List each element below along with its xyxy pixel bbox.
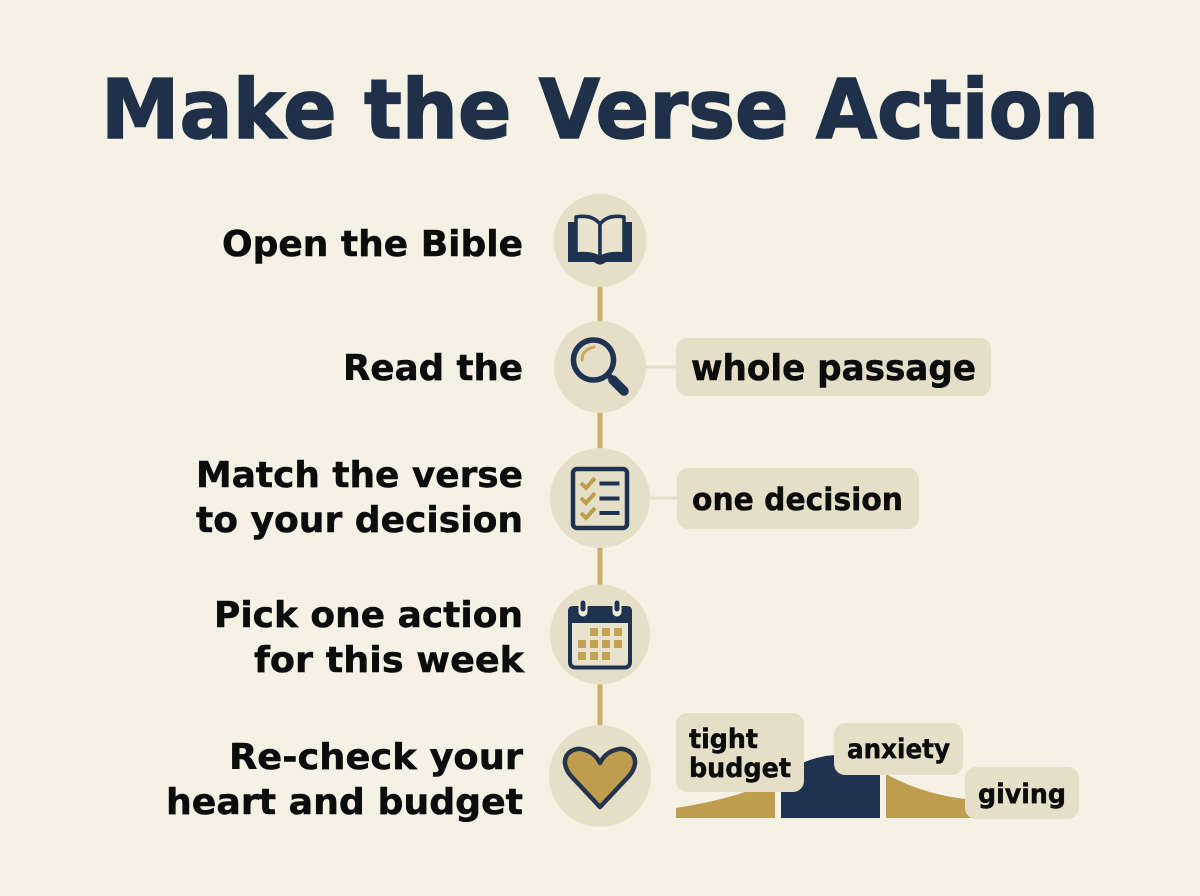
step 3 label [196,455,523,541]
step 3: match the verse [196,448,919,548]
step 3 label: Match the verse [196,455,523,496]
callout: anxiety [834,723,963,775]
icon: magnifying glass [554,321,646,413]
step 4 label: for this week [254,640,525,681]
step 1 label: Open the Bible [222,224,523,265]
step 1: open the bible [222,194,646,287]
step 2 label: Read the [343,348,523,389]
callout: one decision: one decision [692,482,903,518]
step 5 label: heart and budget [166,782,523,823]
step 4 label: Pick one action [214,595,523,636]
callout: giving: giving [978,779,1066,810]
icon: open book [554,194,646,287]
icon: checklist [550,448,650,548]
callout: tight budget: tight [689,724,758,755]
chart: budget curve [676,755,985,818]
connector to one decision [648,496,679,500]
timeline connector line [598,280,602,740]
step 5: re-check heart and budget [166,713,1079,827]
title: Make the Verse Action [101,63,1099,158]
step 5 label: Re-check your [229,737,523,778]
callout: giving [965,767,1079,819]
icon: calendar [550,584,650,684]
callout: tight budget: budget [689,753,791,784]
connector to whole passage [644,366,678,368]
step 3 label: to your decision [196,500,523,541]
step 5 label [166,737,523,823]
icon: heart [549,725,651,827]
callout: one decision [677,468,919,529]
callout: whole passage [676,338,991,396]
step 2: read the whole passage [343,321,991,413]
callout: anxiety: anxiety [847,734,950,765]
callout: whole passage: whole passage [691,348,976,389]
step 4: pick one action [214,584,650,684]
step 4 label [214,595,525,681]
callout: tight budget [676,713,804,792]
